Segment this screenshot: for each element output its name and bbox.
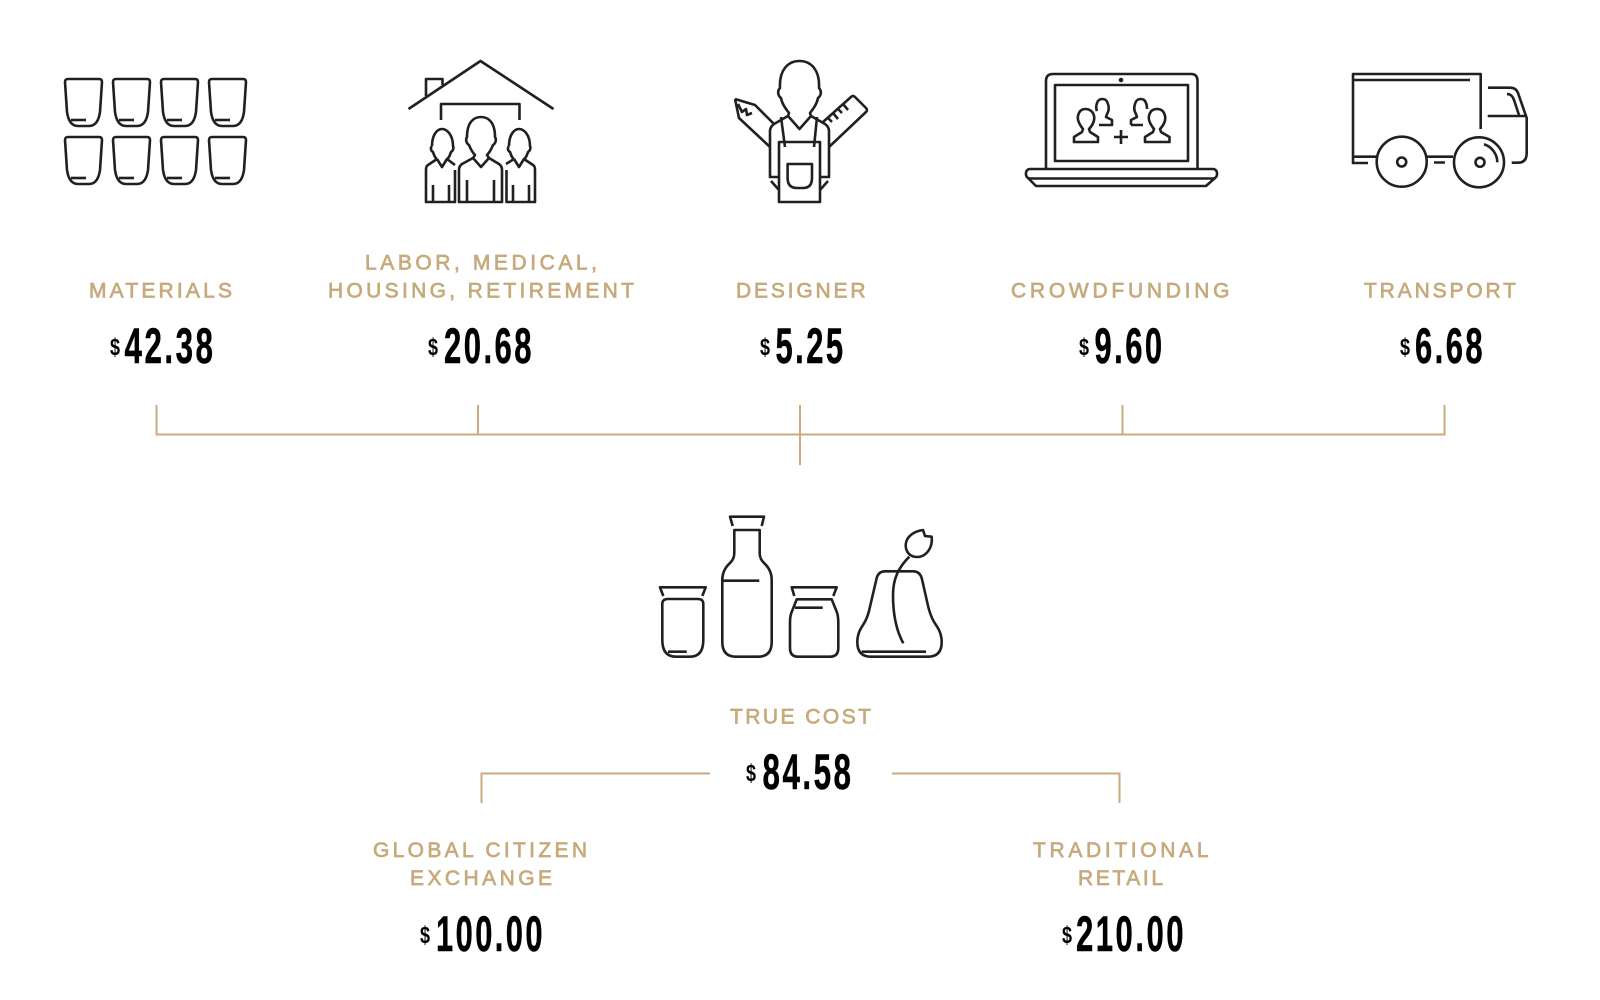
icon: truck [1353,74,1527,187]
panel: traditional retail [1033,839,1208,962]
panel: true cost [660,517,942,800]
value: 100.00: 100.00 [436,906,545,962]
value: 9.60 [1079,318,1164,374]
label: labor, medical, housing, retirement [328,252,634,302]
panel: materials [65,79,246,374]
icon: house with three workers [408,61,554,202]
panel: transport [1353,74,1527,374]
label: traditional retail: RETAIL [1078,867,1163,890]
value: 100.00: $ [420,922,430,949]
value: 20.68 [428,318,534,374]
bracket: to global citizen exchange [482,774,710,803]
value: 20.68: 20.68 [444,318,534,374]
icon: jars, bottle and vase [660,517,942,657]
panel: designer [735,61,867,374]
value: 5.25: 5.25 [776,318,846,374]
label: transport: TRANSPORT [1364,280,1516,302]
label: designer: DESIGNER [736,280,866,302]
value: 5.25 [760,318,846,374]
value: 210.00 [1062,906,1186,962]
panel: global citizen exchange [373,839,587,962]
label: labor, medical, housing, retirement: HOUSING, RETIREMENT [328,280,634,302]
label: labor, medical, housing, retirement: LABOR, MEDICAL, [365,252,597,274]
value: 84.58: 84.58 [762,744,854,800]
value: 100.00 [420,906,545,962]
bracket: components sum to true cost [156,405,1444,465]
value: 6.68 [1400,318,1485,374]
label: true cost: TRUE COST [730,706,871,728]
value: 42.38: $ [110,334,120,361]
value: 6.68: 6.68 [1415,318,1485,374]
value: 20.68: $ [428,334,438,361]
panel: crowdfunding [1011,74,1230,374]
value: 84.58 [746,744,854,800]
value: 9.60: 9.60 [1094,318,1164,374]
label: materials: MATERIALS [89,280,232,302]
label: global citizen exchange [373,839,587,890]
icon: eight cups [65,79,246,184]
icon: designer with pencil and ruler [735,61,867,202]
value: 6.68: $ [1400,334,1410,361]
label: global citizen exchange: GLOBAL CITIZEN [373,839,587,862]
value: 210.00: 210.00 [1076,906,1186,962]
value: 42.38 [110,318,216,374]
panel: labor [328,61,634,374]
label: crowdfunding: CROWDFUNDING [1011,280,1230,302]
label: traditional retail: TRADITIONAL [1033,839,1208,862]
value: 210.00: $ [1062,922,1072,949]
value: 42.38: 42.38 [124,318,216,374]
label: global citizen exchange: EXCHANGE [410,867,552,890]
bracket: to traditional retail [892,774,1120,803]
icon: laptop with people [1026,74,1217,186]
value: 9.60: $ [1079,334,1089,361]
value: 5.25: $ [760,334,770,361]
value: 84.58: $ [746,760,756,787]
label: traditional retail [1033,839,1208,890]
